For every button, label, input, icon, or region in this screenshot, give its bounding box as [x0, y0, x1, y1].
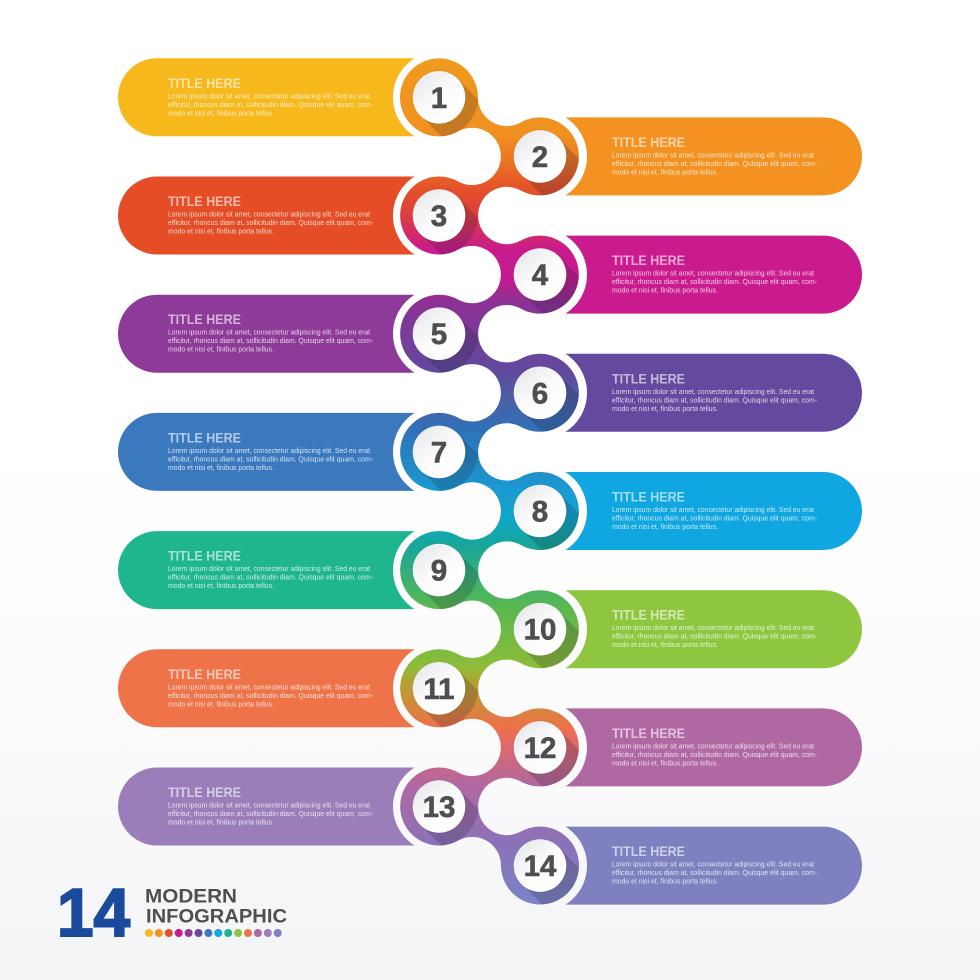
panel: step 2	[565, 117, 862, 195]
number badge 6	[513, 366, 579, 432]
panel: step 7	[118, 413, 415, 491]
number badge 3	[412, 188, 478, 254]
panel: step 6	[565, 354, 862, 432]
panel: step 8: TITLE HERE	[612, 490, 685, 504]
panel: step 14: efficitur, rhoncus diam at, sollicitudin diam. Quisque elit quam, com-	[612, 868, 817, 877]
number badge 9: 9	[431, 555, 447, 588]
panel: step 6: TITLE HERE	[612, 371, 685, 386]
number badge 3: 3	[431, 200, 447, 233]
panel: step 2: modo et nisi et, finibus porta tellus.	[612, 167, 718, 176]
panel: step 14	[565, 827, 862, 905]
panel: step 4: modo et nisi et, finibus porta tellus.	[612, 286, 718, 295]
panel: step 12: modo et nisi et, finibus porta tellus.	[612, 758, 718, 767]
heading: modern: MODERN	[145, 886, 237, 908]
number badge 7	[412, 425, 478, 491]
panel: step 3: efficitur, rhoncus diam at, sollicitudin diam. Quisque elit quam, com-	[168, 218, 373, 227]
number badge 7: 7	[431, 436, 447, 469]
panel: step 8: modo et nisi et, finibus porta tellus.	[612, 522, 718, 531]
panel: step 14: modo et nisi et, finibus porta tellus.	[612, 877, 718, 886]
panel: step 6: Lorem ipsum dolor sit amet, consectetur adipiscing elit. Sed eu erat	[612, 387, 815, 396]
panel: step 10: modo et nisi et, finibus porta tellus.	[612, 640, 718, 649]
panel: step 1: TITLE HERE	[168, 76, 241, 91]
number badge 4: 4	[532, 259, 549, 292]
panel: step 1: modo et nisi et, finibus porta tellus.	[168, 108, 274, 117]
panel: step 11: Lorem ipsum dolor sit amet, consectetur adipiscing elit. Sed eu erat	[168, 682, 371, 691]
logo block: 14 modern infographic	[57, 875, 287, 951]
panel: step 5: TITLE HERE	[168, 312, 241, 327]
number badge 1: 1	[431, 82, 447, 115]
panel: step 12: Lorem ipsum dolor sit amet, consectetur adipiscing elit. Sed eu erat	[612, 741, 815, 750]
number badge 14	[513, 839, 579, 905]
panel: step 13: Lorem ipsum dolor sit amet, consectetur adipiscing elit. Sed eu erat	[168, 800, 371, 810]
panel: step 4: TITLE HERE	[612, 253, 685, 268]
panel: step 13: modo et nisi et, finibus porta tellus.	[168, 818, 274, 826]
panel: step 11: TITLE HERE	[168, 667, 241, 682]
panel: step 3: modo et nisi et, finibus porta tellus.	[168, 226, 274, 236]
number badge 5	[412, 307, 478, 373]
number badge 9	[412, 543, 478, 609]
panel: step 8	[565, 472, 862, 550]
panel: step 11: efficitur, rhoncus diam at, sollicitudin diam. Quisque elit quam, com-	[168, 691, 373, 700]
panel: step 7: Lorem ipsum dolor sit amet, consectetur adipiscing elit. Sed eu erat	[168, 446, 371, 455]
panel: step 11: modo et nisi et, finibus porta tellus.	[168, 699, 274, 708]
panel: step 10: Lorem ipsum dolor sit amet, consectetur adipiscing elit. Sed eu erat	[612, 623, 815, 632]
panel: step 5: modo et nisi et, finibus porta tellus.	[168, 345, 274, 354]
number badge 8: 8	[532, 496, 548, 528]
panel: step 12	[565, 708, 862, 786]
connector ribbon linking all steps	[400, 58, 579, 905]
panel: step 2: Lorem ipsum dolor sit amet, consectetur adipiscing elit. Sed eu erat	[612, 150, 815, 159]
number badge 14: 14	[524, 850, 557, 883]
number badge 2	[513, 129, 579, 195]
big number 14: 14	[57, 875, 130, 951]
panel: step 8: efficitur, rhoncus diam at, sollicitudin diam. Quisque elit quam, com-	[612, 514, 817, 522]
panel: step 1: efficitur, rhoncus diam at, sollicitudin diam. Quisque elit quam, com-	[168, 100, 373, 109]
panel: step 10: efficitur, rhoncus diam at, sollicitudin diam. Quisque elit quam, com-	[612, 632, 817, 641]
panel: step 1	[118, 58, 415, 136]
number badge 13: 13	[423, 791, 455, 824]
heading: infographic: INFOGRAPHIC	[146, 906, 287, 928]
panel: step 4	[565, 236, 862, 314]
number badge 12	[513, 720, 579, 786]
panel: step 5	[118, 295, 415, 373]
panel: step 7: efficitur, rhoncus diam at, sollicitudin diam. Quisque elit quam, com-	[168, 454, 373, 463]
panel: step 9	[118, 531, 415, 609]
panel: step 12: TITLE HERE	[612, 726, 685, 741]
panel: step 14: Lorem ipsum dolor sit amet, consectetur adipiscing elit. Sed eu erat	[612, 860, 815, 869]
colour dots row	[145, 929, 282, 937]
number badge 8	[513, 484, 579, 550]
panel: step 12: efficitur, rhoncus diam at, sollicitudin diam. Quisque elit quam, com-	[612, 750, 817, 759]
panel: step 2: efficitur, rhoncus diam at, sollicitudin diam. Quisque elit quam, com-	[612, 159, 817, 168]
panel: step 6: efficitur, rhoncus diam at, sollicitudin diam. Quisque elit quam, com-	[612, 395, 817, 404]
panel: step 11	[118, 649, 415, 727]
number badge 10	[513, 602, 579, 668]
panel: step 5: Lorem ipsum dolor sit amet, consectetur adipiscing elit. Sed eu erat	[168, 328, 371, 337]
panel: step 2: TITLE HERE	[612, 135, 685, 150]
number badge 5: 5	[431, 318, 447, 351]
number badge 12: 12	[524, 732, 556, 765]
panel: step 9: efficitur, rhoncus diam at, sollicitudin diam. Quisque elit quam, com-	[168, 573, 373, 582]
number badge 4	[513, 248, 579, 314]
panel: step 6: modo et nisi et, finibus porta tellus.	[612, 404, 718, 413]
panel: step 13	[118, 768, 415, 846]
panel: step 3: Lorem ipsum dolor sit amet, consectetur adipiscing elit. Sed eu erat	[168, 210, 371, 218]
panel: step 8: Lorem ipsum dolor sit amet, consectetur adipiscing elit. Sed eu erat	[612, 505, 815, 514]
number badge 2: 2	[532, 141, 548, 174]
panel: step 9: TITLE HERE	[168, 549, 241, 564]
number badge 11	[412, 661, 478, 727]
panel: step 9: modo et nisi et, finibus porta tellus.	[168, 581, 274, 590]
panel: step 7: TITLE HERE	[168, 430, 241, 445]
number badge 11: 11	[423, 673, 455, 706]
panel: step 10	[565, 590, 862, 668]
panel: step 5: efficitur, rhoncus diam at, sollicitudin diam. Quisque elit quam, com-	[168, 336, 373, 345]
number badge 13	[412, 780, 478, 845]
number badge 1	[412, 70, 478, 136]
panel: step 3	[118, 176, 415, 254]
panel: step 1: Lorem ipsum dolor sit amet, consectetur adipiscing elit. Sed eu erat	[168, 91, 371, 100]
number badge 10: 10	[524, 614, 556, 647]
panel: step 7: modo et nisi et, finibus porta tellus.	[168, 463, 274, 472]
number badge 6: 6	[532, 377, 548, 410]
panel: step 13: TITLE HERE	[168, 785, 241, 800]
panel: step 4: Lorem ipsum dolor sit amet, consectetur adipiscing elit. Sed eu erat	[612, 269, 815, 278]
panel: step 3: TITLE HERE	[168, 194, 241, 209]
panel: step 9: Lorem ipsum dolor sit amet, consectetur adipiscing elit. Sed eu erat	[168, 564, 371, 573]
panel: step 4: efficitur, rhoncus diam at, sollicitudin diam. Quisque elit quam, com-	[612, 277, 817, 286]
panel: step 13: efficitur, rhoncus diam at, sollicitudin diam. Quisque elit quam, com-	[168, 809, 373, 818]
panel: step 14: TITLE HERE	[612, 844, 685, 859]
panel: step 10: TITLE HERE	[612, 608, 685, 623]
